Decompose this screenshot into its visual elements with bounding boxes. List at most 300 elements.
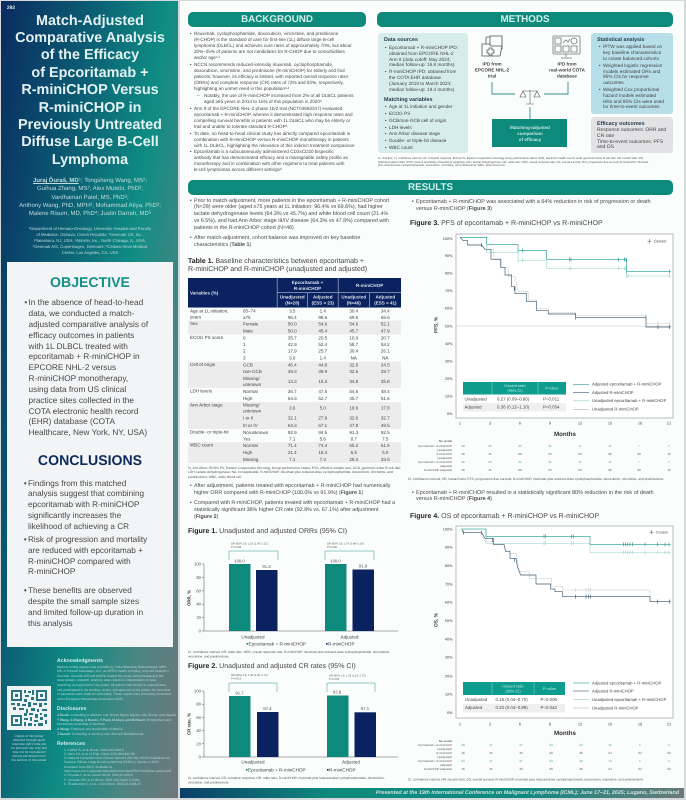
hazard ratio table: Hazard ratio [504,383,526,388]
title: Match-Adjusted [36,12,144,28]
background text: (ORRs) and complete response (CR) rates of 72% and 63%, respectively, [194,80,344,85]
number at risk table: Epcoritamab + R-miniCHOP [418,461,452,464]
label: IPD from EPCORE NHL-2 trial: trial [488,74,496,79]
category labels [241,760,360,764]
number at risk table: 7 [638,444,640,448]
acknowledgments: at the European Hematology Association 2025. [57,697,123,701]
y tick labels: 60 [196,715,202,720]
legend [246,768,356,772]
QR caption [11,734,47,762]
QR caption: for personal use only and [11,746,47,750]
table 1: 54.6 [318,322,327,326]
icon: monitor dashboard [553,36,580,58]
plot frame [456,526,673,718]
value labels: 91.9 [359,564,368,568]
hazard ratio table: Unadjusted [464,396,487,402]
number at risk table: 15 [667,452,671,456]
QR caption: may not be reproduced [13,750,45,754]
table 1: 32.6 [349,369,358,374]
number at risk table: 5 [668,759,670,763]
x tick labels: 12 [578,722,582,726]
figure 2 footnote: vincristine, and prednisolone. [188,780,229,784]
table 1: 98.6 [318,315,327,320]
number at risk table: 24 [548,452,552,456]
background text: NCCN recommends reduced-intensity rituximab, cyclophosphamide, [194,62,333,67]
bars: adjusted [327,696,376,757]
category labels [241,634,359,640]
acknowledgments: reviewing, and approval of the poster. All authors had access to relevant data [57,683,166,687]
number at risk table: 35 [519,751,523,755]
value labels: 91.3 [262,564,271,569]
acknowledgments: Genmab. Genmab A/S and AbbVie funded this study and participated in the [57,674,163,678]
disclosures: J Darrah: Consulting or advisory role: Alta and Mundipharma. [57,732,144,736]
table 1: 35.8 [381,379,390,384]
x tick labels: 1 [459,420,461,426]
table 1: Unadjusted [341,294,366,300]
number at risk table: 26 [579,767,583,771]
number at risk table: 24 [638,767,642,771]
figure 1 footnote: CI, confidence interval; OR, odds ratio; ORR, overall response rate; R-miniCHOP, rituximab plus reduced-dose cyclophosphamide, doxorubicin, [188,650,390,654]
table 1: 30.4 [349,308,358,313]
number at risk table: No. at risk [439,740,452,743]
background text: doxorubicin, vincristine, and prednisone (R-miniCHOP) for elderly and frail [194,68,345,73]
number at risk table: 15 [608,743,612,747]
objective text: efficacy outcomes in patients [28,331,134,340]
y tick labels: 100 [194,688,202,694]
conclusions text: Findings from this matched [28,478,126,488]
background text: monotherapy and in combination with other regimens to treat patients with [194,161,344,166]
methods footnote: plus reduced-dose cyclophosphamide, doxorubicin, vincristine, and prednisolone; WBC, white blood cell. [378,164,505,167]
hazard ratio table: P=0.054 [543,404,560,410]
y tick labels: 20% [445,377,453,381]
table 1: Epcoritamab + [292,280,323,285]
heading: objective: OBJECTIVE [50,274,130,290]
table 1: 54.6 [349,322,358,326]
authors: Guihua Zhang, MS2; Alex Mutebi, PhD3; [37,185,143,192]
y axis title: PFS, % [434,316,440,333]
table 1: WBC count [190,442,213,448]
table 1: 91.3 [349,430,358,435]
figure 2 title: Figure 2. Unadjusted and adjusted CR rates (95% CI) [188,662,356,670]
number at risk table: Epcoritamab + R-miniCHOP [418,760,452,763]
bracket labels: OR (95% CI): 1.10 (1.00–1.22) [231,542,268,546]
conclusions text: Risk of progression and mortality [28,535,147,544]
km curves [462,529,671,604]
hazard ratio table: Adjusted [464,404,482,410]
curve legend: Unadjusted R-miniCHOP [592,705,639,710]
data sources list: the COTA EHR database [389,75,441,80]
censor legend [648,239,667,244]
hazard ratio table: Unadjusted [465,697,488,702]
footer banner [180,788,684,798]
title: Comparative Analysis [15,30,165,46]
y tick labels [194,688,202,760]
table 1: High [243,450,252,455]
legend: R-miniCHOP [328,642,355,646]
table 1 title: R-miniCHOP and R-miniCHOP (unadjusted and adjusted) [188,266,367,273]
matching variables list: WBC count [389,145,413,150]
table 1: 54.6 [349,389,358,394]
number at risk table: 23 [579,743,583,747]
heading: background [188,12,366,27]
table 1 footnote: prednisolone; WBC, white blood cell. [188,475,242,479]
number at risk table: 23 [578,468,582,472]
footer banner: Presented at the 19th International Conference on Malignant Lymphoma (ICML); June 17–21, 2025; Lugano, Switzerland [376,790,679,796]
value labels: 100.0 [234,559,245,564]
number at risk table: Epcoritamab + R-miniCHOP [418,744,452,747]
references: https://www.nccn.org/patients/guidelines/content/PDF/nhl-diffuse-patient.pdf [64,769,171,773]
matching variables list: ECOG PS [389,111,410,116]
figure 4 footnote: CI, confidence interval; HR, hazard ratio; OS, overall survival; R-miniCHOP, rituximab plus reduced-dose cyclophosphamide, doxorubicin, vincristine, and prednisolone. [408,778,644,782]
number at risk table: R-miniCHOP [436,453,452,456]
number at risk table: 15 [667,468,671,472]
significance brackets [229,683,375,692]
objective text: with 1L DLBCL treated with [28,342,128,351]
data sources list: (January 2019 to March 2024; [389,81,452,86]
results text: baseline: vs 6.5%), and had Ann Arbor stage III/IV disease (64.3% vs 47.8%) compared with [194,218,389,224]
statistical analysis list: hazard models estimated [603,94,656,99]
x tick labels: 18 [638,722,642,726]
background text: frail and unable to tolerate standard R-CHOP5 [194,124,287,129]
statistical analysis list: for time-to-event outcomes [603,105,660,110]
figure 1 title: Figure 1. Unadjusted and adjusted ORRs (95% CI) [188,528,347,534]
conclusions text [24,478,148,628]
number at risk table: 23 [488,460,492,464]
table 1: Variables (%) [190,290,218,295]
curve legend: Unadjusted epcoritamab + R-miniCHOP [592,697,667,702]
statistical analysis list [599,44,664,110]
table 1 title [188,258,367,273]
heading: conclusions: CONCLUSIONS [38,452,142,468]
acknowledgments: study design, research, analysis, data collection, interpretation of data, [57,678,156,682]
y tick labels: 20% [445,674,453,678]
number at risk table: 46 [461,452,465,456]
acknowledgments: and participated in the drafting, review, and approval of this poster. No honoraria [57,688,170,692]
table 1: 49.5 [381,423,390,428]
value labels [234,559,368,569]
matching variables list: Age at 1L initiation and gender [389,104,452,109]
table 1: 7.3 [320,457,326,462]
matching variables list: Ann Arbor disease stage [389,131,440,136]
table 1: 65.6 [381,315,390,320]
table 1: 94.5 [318,430,327,435]
table 1: 28.3 [349,457,358,462]
y tick labels [443,237,453,416]
curve legend: Adjusted epcoritamab + R-miniCHOP [592,680,662,685]
hazard ratio table: 0.16 (0.04–0.70) [496,697,528,702]
curve: unadjusted epcoritamab [460,237,671,278]
table 1: 3.6 [289,356,295,360]
results text: response rates: After adjustment, patients treated with epcoritamab + R-miniCHOP had numerically [194,482,390,488]
results text: response rates: statistically significant 38% higher CR rate (92.8% vs. 67.1%) after adjustment [194,507,378,513]
table 1: Sex [190,321,198,326]
y tick labels: 0 [199,754,202,760]
table 1 [188,278,401,463]
table 1: 30.4 [349,348,358,354]
number at risk table: 17 [578,444,582,448]
panel: data sources [378,33,468,153]
results text: PFS [416,198,651,212]
statistical analysis list: 95% CIs for response [603,75,649,80]
table 1: 5.0 [382,450,388,455]
data sources list: Arm 8 (data cutoff: May 2024; [389,56,451,62]
number at risk table: No. at risk [439,440,452,443]
references: 3. National Comprehensive Cancer Network (NCCN). NCCN Guidelines for [64,756,170,760]
y tick labels: 90% [445,254,453,258]
label: IPD from real-world COTA database: IPD from [557,62,577,66]
results text: baseline: lactate dehydrogenase levels (64.3% vs 45.7%) and white blood cell count (21.4% [194,211,388,217]
significance brackets [229,551,374,560]
category labels: Adjusted [342,760,360,764]
box: matching-adjusted comparison: comparison [517,131,543,136]
table 1: R-miniCHOP [294,286,321,291]
y tick labels: 30% [445,360,453,364]
references: 1. Coiffier B, et al. Blood. 2010;116:2040-5. [64,748,125,752]
table 1: 19.6 [349,406,358,410]
data sources list: obtained from EPCORE NHL-2 [389,51,454,56]
label: IPD from real-world COTA database: real-world COTA [549,68,586,73]
table 1: High [243,396,252,401]
bracket labels: OR (95% CI): 1.36 (1.06–1.72) [231,674,268,677]
authors: Juraj Ďuraš, MD1; Tongsheng Wang, MS2; [33,177,147,184]
table 1: 1.4 [320,308,326,313]
table 1 footnote [188,466,401,479]
hazard ratio table: Adjusted [465,705,483,710]
number at risk table: 22 [667,767,671,771]
methods flow diagram [475,36,586,147]
x tick labels: 3 [489,722,491,726]
conclusions text: R-miniCHOP [28,567,75,576]
number at risk table: 22 [608,468,612,472]
conclusions text: likelihood of achieving a CR [28,522,129,531]
number at risk table: 23 [518,444,522,448]
table 1: III or IV [243,423,258,428]
value labels: 92.8 [333,690,342,694]
table 1: 34.8 [349,379,358,384]
hazard ratio table: Hazard ratio [502,684,524,688]
legend: Epcoritamab + R-miniCHOP [248,768,306,772]
affiliations: Plainsboro, NJ, USA; 3AbbVie, Inc., North Chicago, IL, USA; [34,238,146,243]
value labels: 100.0 [330,559,341,564]
table 1: ≥75 [243,315,251,320]
number at risk table: 26 [579,751,583,755]
y tick labels: 80 [196,702,202,707]
table 1: 7.1 [289,436,295,442]
table 1: 17.9 [288,348,297,354]
y tick labels: 70% [445,289,453,293]
y tick labels: 60% [445,601,453,605]
table 1: 29.7 [381,369,390,374]
QR caption: the authors of this poster [11,758,47,762]
box: matching-adjusted comparison [492,119,567,147]
number at risk table: 5 [639,743,641,747]
figure 2 footnote: CI, confidence interval; CR, complete response; OR, odds ratio; R-miniCHOP, rituximab plus reduced-dose cyclophosphamide, doxorubicin, [188,776,385,780]
hazard ratio table: (95% CI) [505,688,521,693]
table 1: Male [243,328,253,334]
table 1: 52.4 [318,342,327,347]
number at risk table: 25 [488,444,492,448]
statistical analysis list: to create balanced cohorts [603,57,659,62]
y tick labels: 40% [445,342,453,346]
curve legend: Unadjusted R-miniCHOP [592,406,639,412]
background text: compelling survival benefits in patients with 1L DLBCL who may be elderly or [194,118,350,123]
table 1 footnote: %, Ann Arbor; ECOG PS, Eastern Cooperative Oncology Group performance status; ESS, effective sample size; GCB, germinal center B cell–like; [188,466,401,470]
hazard ratio table: P=0.011 [543,396,560,402]
censor legend [650,530,669,535]
table 1: NA [382,356,388,360]
number at risk table: R-miniCHOP (adjusted) [424,768,452,771]
table 1: 33.5 [381,457,390,462]
table 1: (N=28) [285,300,299,306]
conclusions text: are reduced with epcoritamab + [28,546,143,555]
authors: Malene Risum, MD, PhD4; Justin Darrah, MD5 [29,210,151,217]
table 1: 52.1 [381,322,390,326]
background text: patients; however, its efficacy is limited, with reported overall response rates [194,74,348,79]
methods footnote: individual patient data; IPTW, inverse probability of treatment weighting; LDH, lactate dehydrogenase; OR, odds ratio; ORR, overall response rate; OS, overall survival; PFS, progression-free survival; R-miniCHOP, rituximab [378,161,648,164]
statistical analysis list: outcomes [603,81,624,86]
matching variables list: LDH levels [389,125,412,130]
number at risk table: 5 [639,759,641,763]
table 1: 35.7 [288,389,297,394]
table 1: 5.6 [320,436,326,442]
x tick labels: 9 [549,420,551,426]
matching variables list: Double- or triple-hit disease [389,138,446,143]
category labels: Unadjusted [241,760,265,764]
y tick labels: 80 [196,575,202,580]
table 1: 1.4 [320,356,326,360]
number at risk table: 22 [608,452,612,456]
number at risk table: 27 [489,759,493,763]
table 1: years [190,314,201,319]
y tick labels: 90% [445,546,453,550]
background text: Epcoritamab is a subcutaneously administered CD3xCD20 bispecific [194,149,334,154]
table 1: 61.5 [381,443,390,448]
number at risk table: 27 [519,743,523,747]
x tick labels: 15 [608,420,612,426]
table 1: 32.7 [381,416,390,420]
table 1: LDH levels [190,388,212,394]
background text: antibody that has demonstrated efficacy and a manageable safety profile as [194,155,348,160]
title [15,12,165,168]
number at risk table: 23 [549,743,553,747]
QR caption: without permission from [12,754,46,758]
number at risk table: 23 [461,759,465,763]
references heading: References [57,740,85,746]
acknowledgments [57,658,171,701]
number at risk table: R-miniCHOP (adjusted) [424,469,452,472]
number at risk table: 29 [549,767,553,771]
number at risk table [418,440,671,472]
disclosures [57,706,176,736]
background text: (R-CHOP) is the standard of care for first-line (1L) diffuse large B-cell [194,37,334,42]
results text: baseline: After match-adjustment, cohort balance was improved on key baseline [194,235,360,241]
x axis title: Months [554,431,577,438]
km curves [460,237,671,329]
results text: baseline: patients in the R-miniCHOP cohort (N=46) [194,225,294,231]
data sources heading: Data sources [384,37,418,43]
figure 3 PFS chart [408,234,674,481]
efficacy outcomes text: CR rate [597,133,614,139]
efficacy outcomes text: Response outcomes: ORR and [597,127,666,133]
heading: methods: METHODS [500,14,550,25]
title: of the Efficacy [41,47,139,63]
table 1: 20.7 [381,335,390,340]
acknowledgments: MS, of Parexel Advantage, LLC, an OPEN Health company, and was funded by [57,669,169,673]
bars: adjusted [325,564,374,631]
table 1: 15.3 [318,379,327,384]
table 1: Yes [243,436,250,442]
methods footnote: 1L, first-line; CI, confidence interval; CR, complete response; ECOG PS, Eastern Cooperative Oncology Group performance status; EHR, electronic health record; GCB, germinal center B cell–like; HR, hazard ratio; IPD, [378,157,644,160]
data sources list: median follow-up: 19.4 months) [389,87,454,92]
data sources list [385,45,458,92]
table 1: Adjusted [376,294,395,300]
table 1: 5.0 [320,406,326,410]
curve legend: Adjusted epcoritamab + R-miniCHOP [592,382,662,387]
table 1: 74.4 [318,443,327,448]
table 1: Normal [243,389,258,394]
figure 4 title: Figure 4. OS of epcoritamab + R-miniCHOP vs R-miniCHOP [410,512,599,520]
heading: results [188,180,673,195]
bracket labels: P=0.006 [329,678,340,681]
number at risk table: (unadjusted) [437,748,452,751]
value labels: 67.1 [361,706,370,711]
icon: folder with medical cross [482,36,502,56]
table 1: 21.4 [288,450,297,455]
statistical analysis list: key baseline characteristics [603,51,661,56]
matching variables list: GCB/non-GCB cell of origin [389,118,446,123]
box: matching-adjusted comparison: Matching-adjusted [510,125,550,130]
number at risk table: 45 [489,767,493,771]
results text: response rates: higher ORR compared with R-miniCHOP (100.0% vs 91.9%) (Figure 1) [194,490,363,496]
number at risk table: (unadjusted) [437,756,452,759]
table 1: 6.5 [351,450,357,455]
table 1: 71.4 [288,443,297,448]
QR caption: response (QR) code are [12,742,46,746]
curve legend: Adjusted R-miniCHOP [592,688,634,693]
methods footnote [378,157,648,167]
table 1: 50.0 [288,322,297,326]
curve: adjusted R-miniCHOP [460,237,671,329]
table 1: I or II [243,416,253,420]
matching variables heading: Matching variables [384,97,433,103]
number at risk table: 7 [638,460,640,464]
objective text [28,298,148,439]
bars: unadjusted [229,696,278,757]
authors [19,176,161,217]
data sources list: R-miniCHOP IPD: obtained from [389,69,456,74]
results text: OS: versus R-miniCHOP (Figure 4) [416,496,492,502]
results text: OS: Epcoritamab + R-miniCHOP resulted in a statistically significant 80% reduction in the risk of death [416,490,654,496]
table 1: 42.9 [288,342,297,347]
table 1: 17.8 [381,406,390,410]
table 1: non-GCB [243,369,262,374]
background text: lymphoma (DLBCL) and achieves cure rates of approximately 70%, but about [194,43,352,48]
table 1: 8.7 [351,436,357,442]
y tick labels: 80% [445,564,453,568]
table 1: 51.6 [381,396,390,401]
table 1: 50.0 [288,328,297,334]
disclosures: stock/stock ownership of Genmab. [57,722,106,726]
background text: aged ≥65 years in 2014 to 15% of this population in 20204 [204,99,322,104]
matching variables list [385,104,452,150]
figure 1 footnote: vincristine, and prednisolone. [188,654,229,658]
table 1: NA [351,356,357,360]
table 1: 3.5 [289,308,295,313]
figure 2 footnote [188,776,385,784]
conclusions text: epcoritamab with R-miniCHOP [28,500,139,509]
table 1: ECOG PS score [190,335,223,340]
table 1: Missing/ [243,376,260,381]
